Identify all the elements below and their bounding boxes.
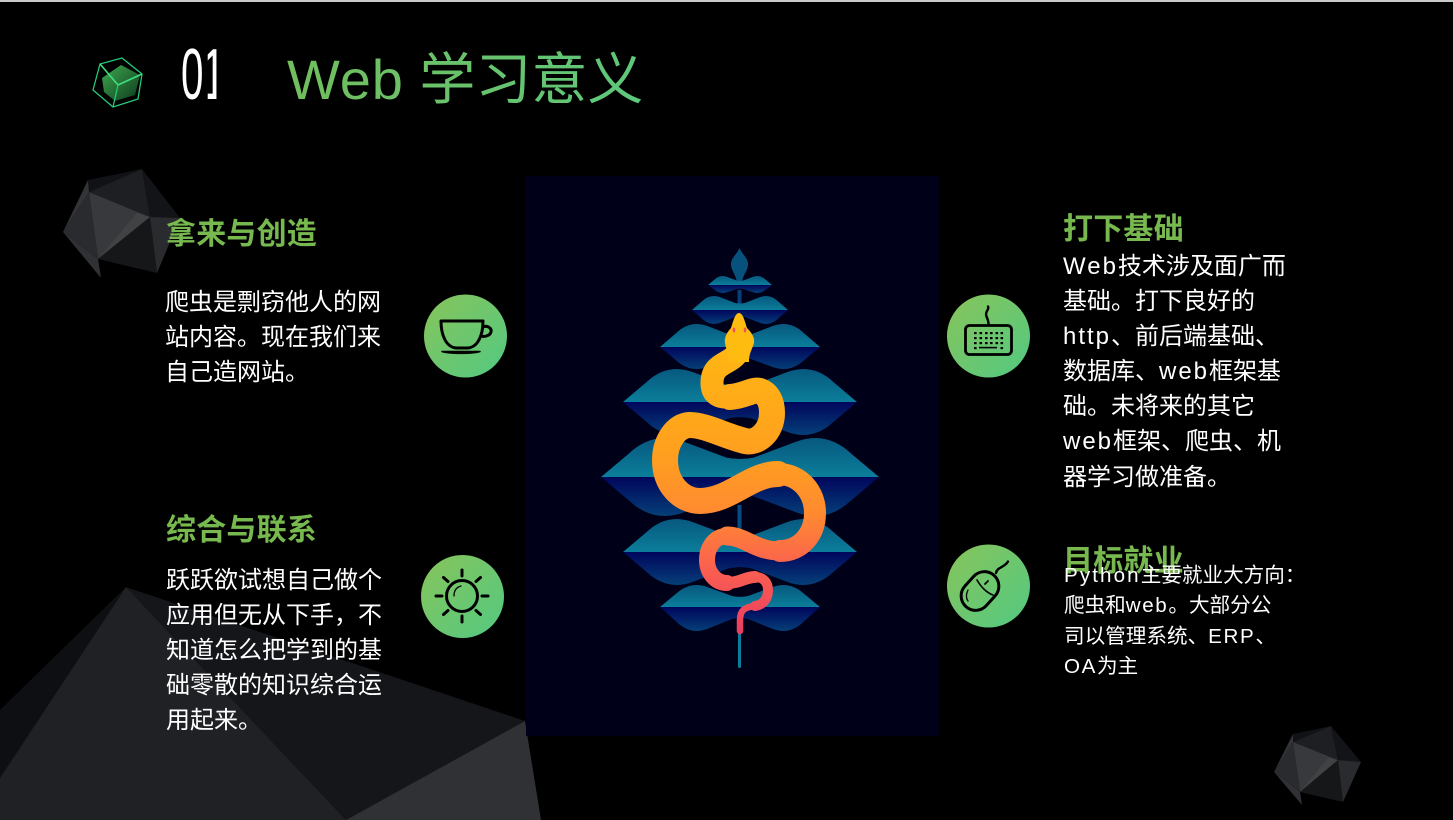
background mountain polygons (0, 587, 541, 820)
text: 拿来与创造 body: 爬虫是剽窃他人的网 (165, 289, 381, 316)
decorative polyhedron bottom-right (1274, 726, 1361, 805)
text: 目标就业 body: 爬虫和web。大部分公 (1064, 594, 1271, 617)
icon: coffee cup (424, 294, 507, 378)
decorative polyhedron top-left (63, 169, 180, 278)
text: 打下基础 body: 础。未将来的其它 (1063, 393, 1255, 420)
text: 目标就业 body: Python主要就业大方向： (1064, 564, 1305, 587)
text: 打下基础 body: Web技术涉及面广而 (1063, 253, 1286, 280)
icon: mouse (947, 544, 1030, 628)
text: 打下基础 body (1063, 253, 1286, 491)
snake head (725, 313, 754, 362)
text: 综合与联系 body: 知道怎么把学到的基 (166, 637, 382, 664)
text: 打下基础 body: http、前后端基础、 (1063, 323, 1279, 350)
stem (738, 630, 741, 668)
text: 综合与联系 body: 用起来。 (166, 707, 262, 734)
section number: 0 (181, 35, 203, 115)
text: 拿来与创造 body: 站内容。现在我们来 (165, 324, 381, 351)
heading: 打下基础: 打下基础 (1063, 213, 1184, 246)
text: 拿来与创造 body: 自己造网站。 (165, 359, 309, 386)
heading: 拿来与创造: 拿来与创造 (166, 218, 317, 251)
text: 综合与联系 body: 跃跃欲试想自己做个 (166, 567, 382, 594)
text: 综合与联系 body (166, 567, 382, 734)
text: 打下基础 body: 器学习做准备。 (1063, 464, 1231, 491)
section number: 1 (200, 35, 228, 115)
text: 目标就业 body (1064, 564, 1305, 678)
text: 打下基础 body: 基础。打下良好的 (1063, 288, 1255, 315)
text: 打下基础 body: 数据库、web框架基 (1063, 358, 1281, 385)
text: 拿来与创造 body (165, 289, 381, 386)
icon: green cube (93, 58, 142, 107)
snake (665, 345, 815, 631)
text: 目标就业 body: 司以管理系统、ERP、 (1064, 625, 1276, 648)
text: 综合与联系 body: 应用但无从下手，不 (166, 602, 382, 629)
icon: sun (421, 555, 504, 638)
heading: 目标就业: 目标就业 (1063, 545, 1184, 578)
leaf tip (731, 248, 748, 283)
top edge line (0, 0, 1453, 2)
poster background (526, 176, 939, 736)
text: 打下基础 body: web框架、爬虫、机 (1063, 428, 1281, 455)
icon: keyboard (947, 294, 1030, 378)
central python poster (526, 176, 939, 736)
section number (181, 35, 216, 115)
snake eyes (733, 328, 746, 332)
text: 综合与联系 body: 础零散的知识综合运 (166, 672, 382, 699)
leaf layers (601, 276, 879, 631)
heading: 综合与联系: 综合与联系 (166, 514, 317, 547)
text: 目标就业 body: OA为主 (1064, 655, 1138, 678)
